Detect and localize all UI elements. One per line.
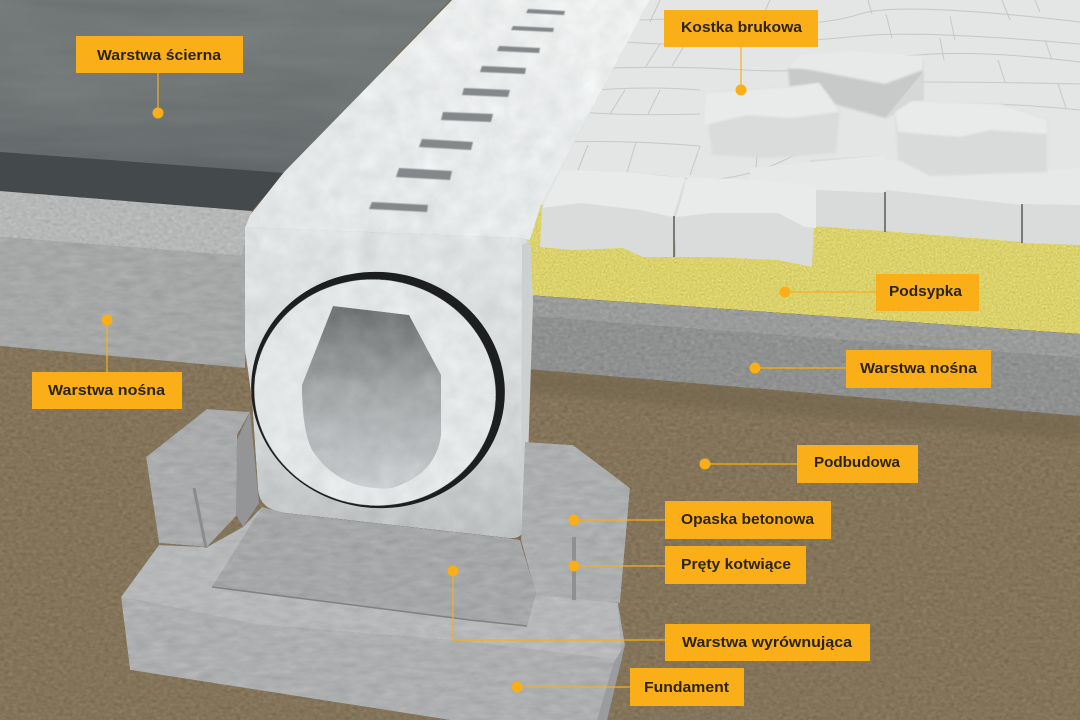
left concrete haunch bbox=[146, 409, 259, 548]
front paver centre bbox=[674, 177, 816, 267]
right paver row bbox=[750, 155, 1080, 245]
callout: Podbudowa: Podbudowa bbox=[814, 454, 901, 471]
callout: Pręty kotwiące bbox=[568, 546, 806, 584]
callout: Pręty kotwiące: Pręty kotwiące bbox=[681, 556, 791, 573]
callout: Fundament bbox=[512, 668, 744, 706]
callout: Warstwa wyrównująca bbox=[448, 566, 870, 661]
callout: Warstwa nośna (left) bbox=[32, 314, 182, 409]
callout: Podsypka: Podsypka bbox=[889, 283, 963, 300]
loose paver, rear bbox=[788, 51, 923, 118]
asphalt wearing course bbox=[0, 0, 450, 211]
callout: Warstwa nośna (right): Warstwa nośna bbox=[860, 360, 978, 377]
right base layer bbox=[526, 295, 1080, 416]
callout: Fundament: Fundament bbox=[644, 679, 729, 696]
callout: Warstwa ścierna bbox=[76, 36, 243, 118]
channel top surface bbox=[245, 0, 650, 240]
loose paver, right bbox=[895, 101, 1047, 176]
callout: Kostka brukowa: Kostka brukowa bbox=[681, 19, 803, 36]
pipe end bbox=[239, 264, 511, 521]
channel front face bbox=[245, 227, 531, 538]
front paver left bbox=[540, 170, 685, 257]
callout: Kostka brukowa bbox=[664, 10, 818, 96]
foundation bbox=[121, 507, 625, 720]
callout: Warstwa wyrównująca: Warstwa wyrównująca bbox=[682, 634, 853, 651]
callout: Warstwa ścierna: Warstwa ścierna bbox=[97, 47, 222, 64]
callout: Warstwa nośna (left): Warstwa nośna bbox=[48, 382, 166, 399]
callout: Opaska betonowa bbox=[568, 501, 831, 539]
callout: Warstwa nośna (right) bbox=[750, 350, 991, 388]
levelling layer bbox=[212, 507, 536, 626]
concrete drainage channel bbox=[236, 0, 650, 538]
right concrete haunch bbox=[521, 442, 630, 603]
soil background bbox=[0, 340, 1080, 720]
bedding sand layer bbox=[526, 200, 1080, 334]
loose paver, middle bbox=[705, 83, 840, 158]
callout: Podbudowa bbox=[700, 445, 918, 483]
callout: Podsypka bbox=[780, 274, 979, 311]
pipe opening bbox=[302, 306, 441, 488]
gasket ring bbox=[236, 255, 520, 525]
slot openings bbox=[369, 9, 565, 212]
left base layer bbox=[0, 191, 252, 368]
paving joints bbox=[562, 0, 1080, 180]
paving stones bbox=[535, 0, 1080, 267]
callout: Opaska betonowa: Opaska betonowa bbox=[681, 511, 815, 528]
